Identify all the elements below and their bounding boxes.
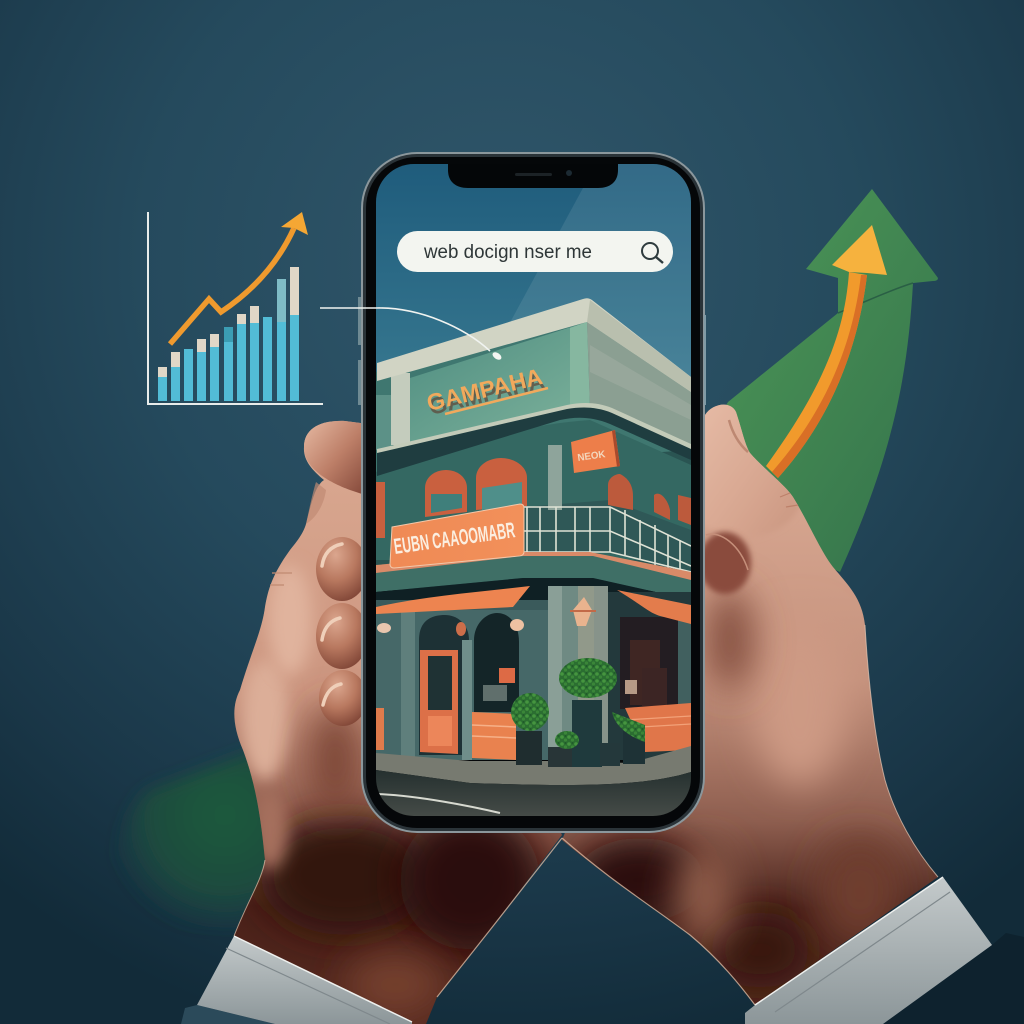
NEOK hanging sign: [571, 430, 620, 473]
floor band: [376, 556, 691, 592]
road: [376, 770, 691, 816]
bars: [158, 267, 299, 401]
palm shading: [260, 815, 430, 935]
balcony interior glass: [524, 500, 691, 560]
orange banner: EUBN CAAOOMABR: [392, 517, 517, 559]
left shirt cuff and sleeve: [181, 936, 412, 1024]
left hand: [234, 420, 562, 1024]
upper windows: [376, 445, 691, 538]
finger: index: [316, 537, 368, 601]
wall lanterns: [377, 597, 596, 636]
arched door and window: [401, 612, 519, 760]
finger: ring: [319, 670, 367, 726]
sky: [376, 164, 691, 377]
orange rising arrow: [766, 225, 887, 478]
roof: [377, 298, 691, 392]
building mid floor: [376, 403, 691, 612]
building upper facade: [376, 298, 691, 480]
green growth arrow behind the phone: [700, 189, 938, 572]
orange wainscot: [472, 712, 516, 760]
green arrow tail fading at lower left: [110, 745, 290, 930]
phone notch: [448, 164, 618, 188]
balcony railing: [523, 507, 691, 572]
finger: middle: [316, 603, 368, 669]
GAMPAHA sign: GAMPAHA: [426, 367, 547, 420]
thumb: [705, 404, 800, 520]
icon: magnifier: [642, 243, 663, 263]
search bar: [397, 231, 673, 272]
orange banner: [390, 504, 524, 568]
right awning: [617, 590, 691, 624]
pointer line start outside phone: [320, 307, 376, 309]
second finger lump: [699, 532, 751, 594]
bar chart: [148, 212, 323, 404]
planters and bushes: [511, 658, 645, 767]
right hand: [560, 400, 950, 1020]
right shop window: [620, 617, 691, 752]
top finger: [304, 421, 368, 496]
GAMPAHA sign: GAMPAHA: [424, 363, 545, 416]
trend arrow: [170, 212, 308, 344]
left awning: [376, 586, 530, 614]
search bar: web docign nser me: [423, 242, 592, 263]
pointer line into screen: [376, 308, 503, 361]
sidewalk: [376, 746, 691, 785]
balcony base: [376, 552, 691, 582]
phone screen: [376, 164, 691, 816]
phone body: [358, 152, 706, 833]
ground floor: [376, 586, 691, 760]
right shirt cuff and sleeve: [745, 877, 1024, 1024]
NEOK hanging sign: NEOK: [577, 449, 607, 464]
axes: [148, 212, 323, 404]
